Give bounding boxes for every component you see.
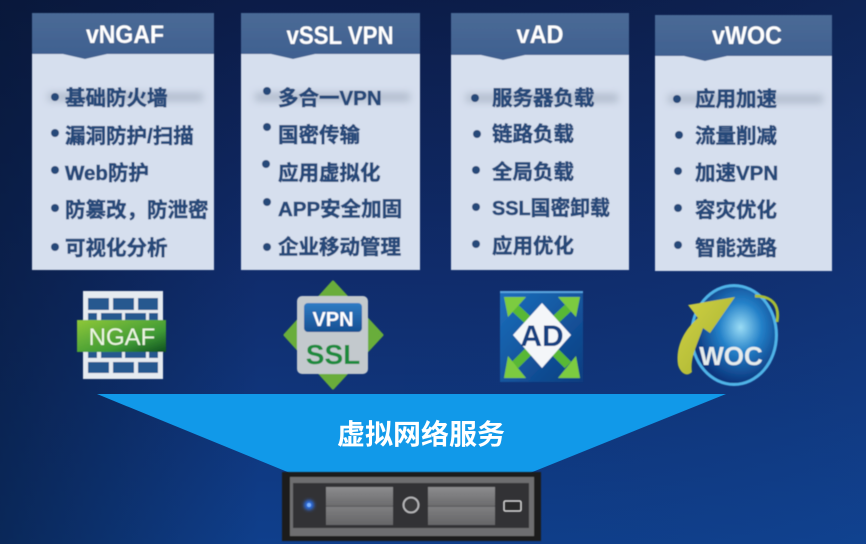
icon: WOC globe: WOC	[699, 341, 763, 371]
list: vAD features: 服务器负载	[492, 87, 594, 110]
list: vSSL VPN features	[262, 87, 402, 259]
panel: vAD	[451, 13, 629, 270]
list: vWOC features: 应用加速	[695, 87, 777, 111]
list: vAD features: 应用优化	[492, 234, 574, 258]
icon: NGAF firewall: NGAF	[89, 324, 155, 351]
icon: NGAF firewall	[77, 291, 166, 379]
panel: vSSL VPN	[241, 13, 420, 270]
heading: vNGAF: vNGAF	[86, 21, 164, 49]
list: vWOC features: 容灾优化	[695, 198, 777, 222]
list: vNGAF features	[51, 87, 208, 260]
list: vWOC features: 智能选路	[695, 237, 777, 260]
icon: SSL VPN: SSL	[306, 339, 360, 370]
panel: vWOC	[655, 15, 832, 271]
list: vAD features: 链路负载	[492, 123, 574, 146]
list: vWOC features: 加速VPN	[695, 162, 778, 185]
heading: vAD: vAD	[516, 21, 564, 49]
list: vSSL VPN features: 多合一VPN	[278, 87, 382, 110]
list: vNGAF features: 防篡改，防泄密	[65, 198, 208, 222]
icon: SSL VPN	[285, 282, 382, 388]
list: vNGAF features: Web防护	[65, 162, 149, 185]
list: vSSL VPN features: APP安全加固	[278, 197, 402, 221]
list: vWOC features	[673, 87, 778, 260]
server appliance	[282, 472, 541, 541]
list: vNGAF features: 可视化分析	[65, 237, 168, 260]
list: vSSL VPN features: 国密传输	[278, 123, 360, 147]
funnel label: 虚拟网络服务	[337, 419, 505, 450]
heading: vWOC	[655, 15, 832, 61]
heading: vAD	[451, 13, 629, 60]
panel: vNGAF	[32, 13, 214, 270]
list: vAD features	[471, 87, 610, 258]
icon: AD: AD	[520, 320, 564, 353]
list: vAD features: 全局负载	[492, 160, 574, 184]
funnel: virtual network services	[97, 394, 726, 473]
icon: WOC globe	[678, 284, 778, 386]
heading: vWOC: vWOC	[712, 22, 782, 50]
icon: AD	[500, 291, 583, 382]
heading: vSSL VPN: vSSL VPN	[286, 22, 394, 50]
list: vNGAF features: 漏洞防护/扫描	[65, 125, 194, 148]
list: vSSL VPN features: 企业移动管理	[278, 235, 401, 259]
heading: vNGAF	[32, 13, 214, 59]
list: vWOC features: 流量削减	[695, 125, 777, 148]
list: vSSL VPN features: 应用虚拟化	[278, 161, 380, 185]
list: vNGAF features: 基础防火墙	[65, 87, 168, 110]
icon: SSL VPN: VPN	[312, 309, 354, 331]
list: vAD features: SSL国密卸载	[492, 196, 610, 220]
heading: vSSL VPN	[241, 13, 420, 59]
